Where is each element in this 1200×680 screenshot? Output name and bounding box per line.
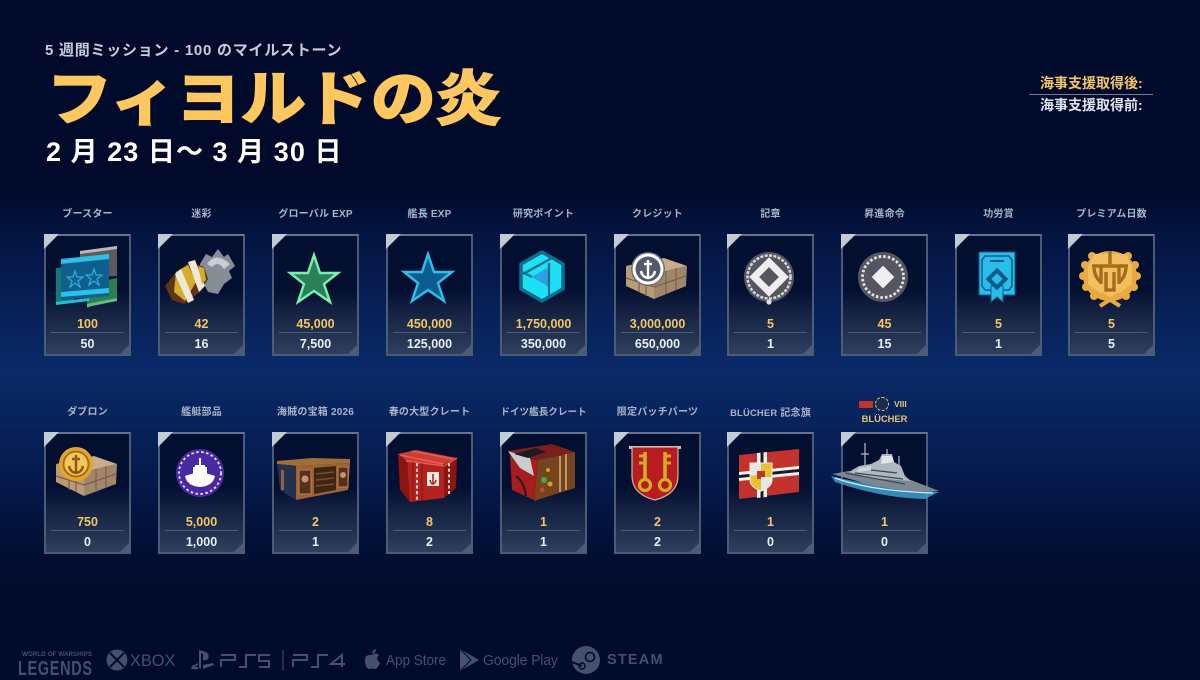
reward card: German commander crate: 1	[540, 515, 547, 529]
reward card: credits	[614, 208, 701, 356]
icon: pirate treasure chest	[277, 458, 350, 500]
reward card: premium days: 5	[1108, 317, 1115, 331]
reward card: emblems: 5	[767, 317, 774, 331]
reward card: limited patch parts: 限定パッチパーツ	[617, 407, 698, 418]
reward card: camouflage: 42	[195, 317, 208, 331]
reward card: Blücher commemorative flag: BLÜCHER 記念旗	[730, 407, 811, 419]
reward card: Blücher commemorative flag: 0	[767, 535, 774, 549]
logo: Steam	[572, 646, 664, 674]
icon: promotion order medal	[858, 252, 908, 302]
icon: research points hexagon	[519, 250, 565, 303]
reward card: boosters: 100	[77, 317, 98, 331]
reward card: commendation: 5	[995, 317, 1002, 331]
reward card: boosters: 50	[81, 337, 94, 351]
reward card: ship parts	[158, 406, 245, 554]
icon: Blücher cruiser	[831, 443, 939, 499]
logo: App Store: App Store	[386, 652, 446, 669]
reward card: global XP	[272, 208, 359, 356]
reward card: premium days	[1068, 208, 1155, 356]
date range: 2 月 23 日〜 3 月 30 日	[46, 137, 343, 167]
reward card: limited patch parts	[614, 406, 701, 554]
icon: booster flags	[56, 246, 117, 308]
reward card: research points: 研究ポイント	[513, 209, 574, 220]
reward card: ship parts: 1,000	[186, 535, 217, 549]
reward card: research points: 350,000	[521, 337, 566, 351]
reward card: spring big crate: 2	[426, 535, 433, 549]
logo: App Store	[364, 649, 447, 671]
reward card: research points	[500, 208, 587, 356]
reward card: promotion orders	[841, 208, 928, 356]
reward card: limited patch parts: 2	[654, 535, 661, 549]
ship heading: nation, class, tier and name	[859, 397, 908, 424]
reward card: promotion orders: 昇進命令	[864, 209, 905, 220]
reward card: camouflage: 16	[195, 337, 208, 351]
reward card: German commander crate: 1	[540, 535, 547, 549]
logo: Google Play	[460, 649, 560, 671]
reward card: commander XP	[386, 208, 473, 356]
reward card: German commander crate	[500, 406, 587, 554]
reward card: spring big crate	[386, 406, 473, 554]
reward card: Blücher commemorative flag: 1	[767, 515, 774, 529]
reward card: premium days: プレミアム日数	[1076, 209, 1147, 220]
title: フィヨルドの炎	[47, 66, 501, 132]
reward card: commendation: 1	[995, 337, 1002, 351]
icon: emblem medal	[744, 252, 794, 305]
logo: World of Warships Legends: WORLD OF WARSHIPS	[22, 651, 92, 658]
reward card: pirate chest: 海賊の宝箱 2026	[277, 407, 354, 418]
reward card: emblems	[727, 208, 814, 356]
reward card: research points: 1,750,000	[516, 317, 571, 331]
logo: Xbox	[106, 649, 177, 671]
logo: Steam: STEAM	[607, 652, 664, 668]
reward card: spring big crate: 8	[426, 515, 433, 529]
reward card: limited patch parts: 2	[654, 515, 661, 529]
reward card: boosters	[44, 208, 131, 356]
logo: World of Warships Legends: LEGENDS	[18, 658, 93, 680]
reward card: doubloons: ダブロン	[67, 407, 108, 418]
reward card: doubloons: 750	[77, 515, 98, 529]
icon: red crate	[398, 450, 458, 502]
reward card: doubloons: 0	[84, 535, 91, 549]
icon: camouflage shells	[165, 249, 235, 304]
reward card: commendation: 功労賞	[983, 209, 1014, 220]
reward card: doubloons	[44, 406, 131, 554]
reward card: commendation	[955, 208, 1042, 356]
reward card: premium days: 5	[1108, 337, 1115, 351]
reward card: commander XP: 125,000	[407, 337, 452, 351]
legend label: before naval support: 海事支援取得前:	[1040, 97, 1143, 113]
ship heading: nation, class, tier and name: VIII	[894, 399, 907, 409]
icon: blue certificate	[978, 252, 1016, 303]
reward card: promotion orders: 45	[878, 317, 891, 331]
icon: credits crate with coin	[626, 252, 687, 299]
logo: Google Play: Google Play	[483, 652, 558, 669]
reward card: credits: 650,000	[635, 337, 680, 351]
ship heading: nation, class, tier and name: BLÜCHER	[862, 413, 907, 424]
icon: commemorative flag	[739, 449, 799, 499]
icon: doubloons crate with coin	[56, 447, 117, 496]
icon: ship parts badge	[176, 449, 224, 497]
icon: premium gold laurel	[1079, 251, 1141, 308]
footer: game and platform logos	[18, 646, 664, 680]
icon: German commander crate	[508, 444, 575, 501]
reward card: emblems: 1	[767, 337, 774, 351]
reward card: commander XP: 450,000	[407, 317, 452, 331]
legend label: after naval support: 海事支援取得後:	[1040, 75, 1143, 91]
reward card: emblems: 記章	[760, 209, 781, 220]
reward card: promotion orders: 15	[878, 337, 891, 351]
reward card: spring big crate: 春の大型クレート	[389, 407, 470, 418]
reward card: German commander crate: ドイツ艦長クレート	[500, 407, 587, 418]
reward card: boosters: ブースター	[62, 209, 113, 220]
logo: PlayStation 5 and 4	[190, 648, 348, 672]
logo: Xbox: XBOX	[130, 651, 175, 670]
reward card: global XP: グローバル EXP	[278, 209, 353, 220]
reward card: camouflage	[158, 208, 245, 356]
reward card: commander XP: 艦長 EXP	[408, 209, 452, 220]
icon: red patch with keys	[629, 446, 681, 501]
reward card: Blücher ship	[831, 397, 939, 554]
reward card: Blücher commemorative flag	[727, 407, 814, 554]
subtitle: 5 週間ミッション - 100 のマイルストーン	[45, 42, 342, 59]
reward card: pirate chest: 1	[312, 535, 319, 549]
reward card: Blücher ship: 1	[881, 515, 888, 529]
reward card: credits: クレジット	[632, 209, 683, 220]
legend: with and without naval support	[1029, 75, 1153, 113]
icon: blue star	[400, 250, 456, 304]
reward card: camouflage: 迷彩	[191, 209, 212, 220]
reward card: pirate chest: 2	[312, 515, 319, 529]
reward card: Blücher ship: 0	[881, 535, 888, 549]
icon: green star	[286, 251, 342, 305]
reward card: global XP: 45,000	[296, 317, 335, 331]
reward card: ship parts: 5,000	[186, 515, 217, 529]
reward card: ship parts: 艦艇部品	[181, 407, 222, 418]
reward card: pirate chest	[272, 406, 359, 554]
reward card: credits: 3,000,000	[630, 317, 685, 331]
reward card: global XP: 7,500	[300, 337, 331, 351]
